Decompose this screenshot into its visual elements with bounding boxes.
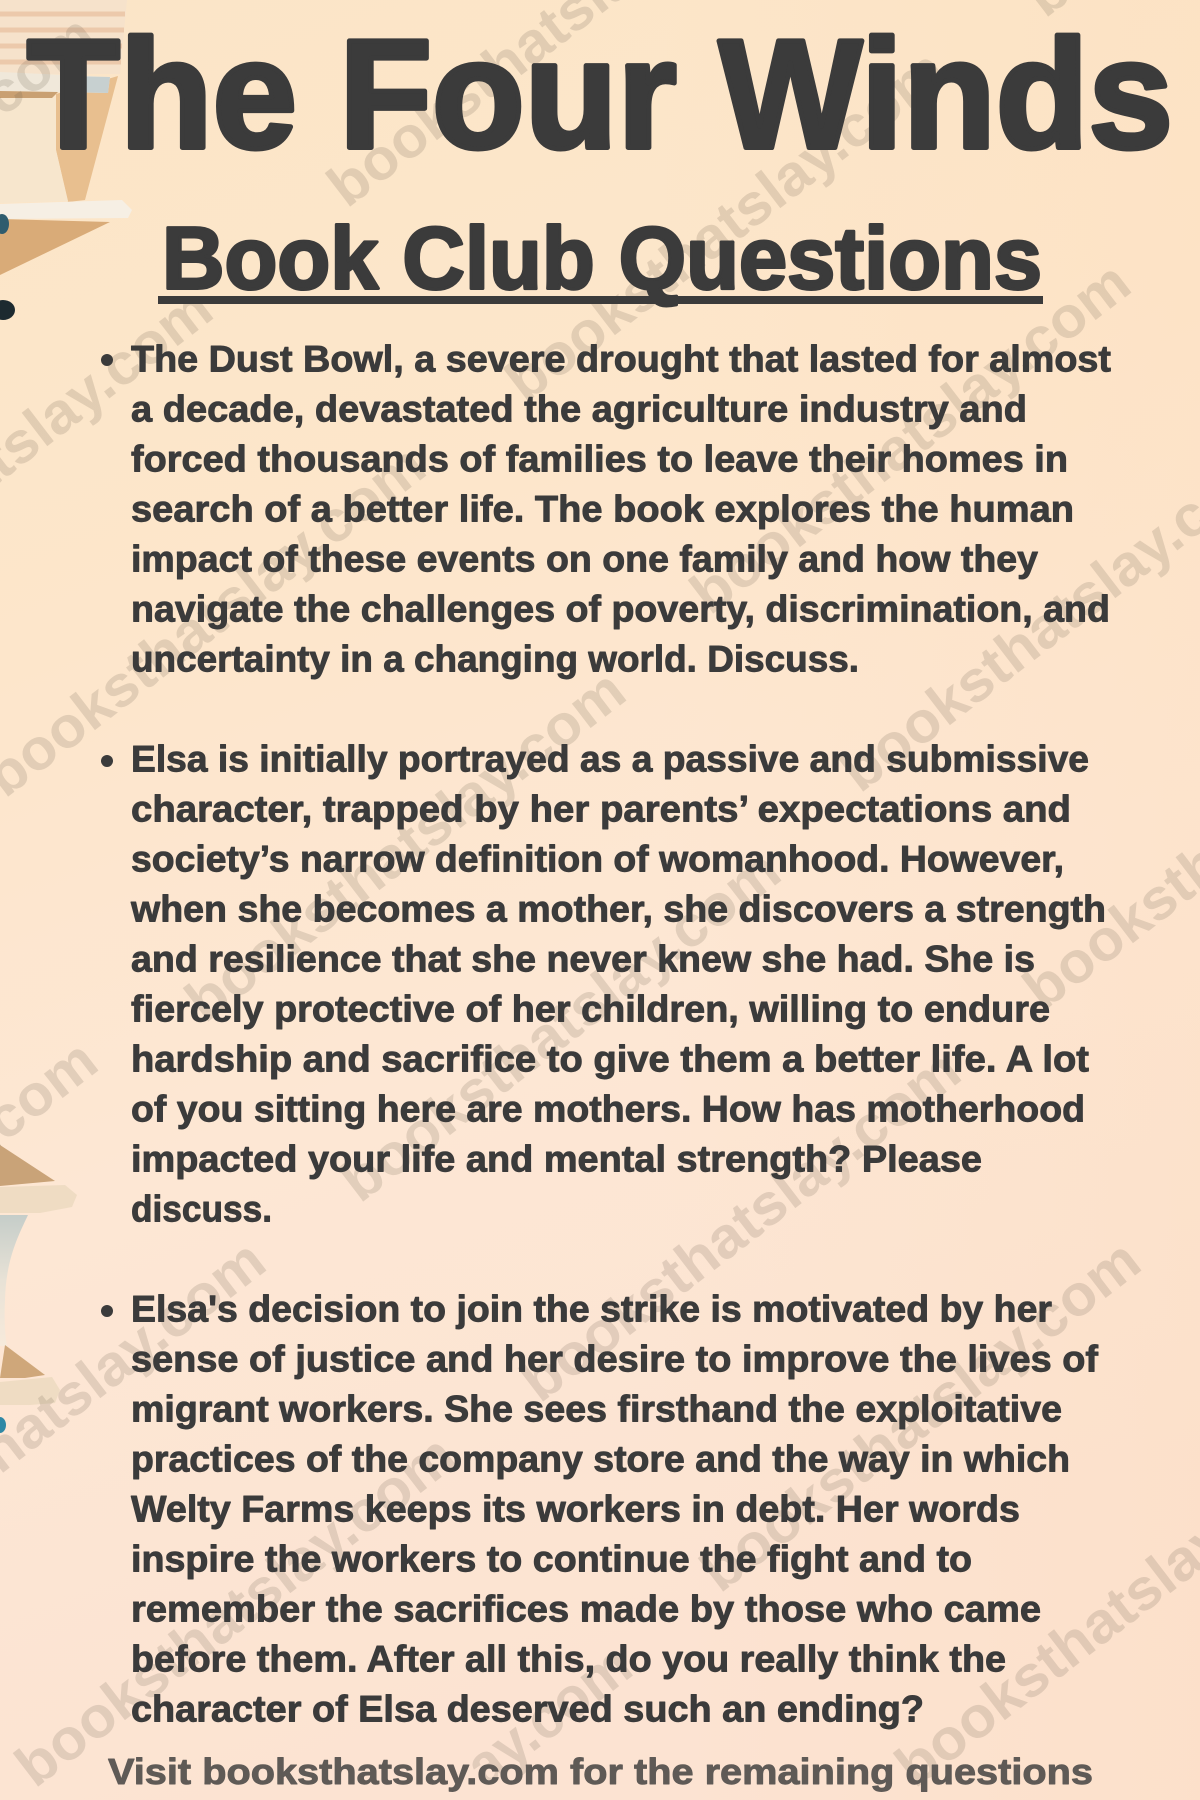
watermarks: booksthatslay.com — [493, 37, 957, 414]
question 1: The Dust Bowl, a severe drought that lasted for almost — [131, 338, 1112, 380]
question 2 — [101, 738, 1106, 1230]
watermarks: booksthatslay.com — [678, 249, 1142, 626]
question 2: when she becomes a mother, she discovers a strength — [130, 888, 1106, 930]
question 2: impacted your life and mental strength? Please — [131, 1138, 982, 1180]
question 3: inspire the workers to continue the fight and to — [131, 1538, 972, 1580]
question 1: forced thousands of families to leave their homes in — [131, 438, 1068, 480]
question 1 — [101, 338, 1112, 680]
question 3: remember the sacrifices made by those who came — [131, 1588, 1041, 1630]
question 2: of you sitting here are mothers. How has motherhood — [131, 1088, 1085, 1130]
watermarks: booksthatslay.com — [3, 1422, 467, 1799]
question 3: migrant workers. She sees firsthand the exploitative — [131, 1388, 1062, 1430]
question 1: navigate the challenges of poverty, discrimination, and — [131, 588, 1110, 630]
question 3 — [101, 1288, 1099, 1730]
question 1: a decade, devastated the agriculture industry and — [131, 388, 1027, 430]
question 3: practices of the company store and the way in which — [131, 1438, 1070, 1480]
question 1: uncertainty in a changing world. Discuss. — [131, 638, 859, 680]
question 1: impact of these events on one family and how they — [131, 538, 1038, 580]
subtitle: Book Club Questions — [162, 208, 1042, 308]
watermarks: booksthatslay.com — [688, 1227, 1152, 1604]
question 2: Elsa is initially portrayed as a passive and submissive — [131, 738, 1089, 780]
question 3: Welty Farms keeps its workers in debt. Her words — [131, 1488, 1020, 1530]
question 2: character, trapped by her parents’ expectations and — [131, 788, 1071, 830]
book stack decoration: lower left — [0, 1145, 77, 1433]
question 3: character of Elsa deserved such an ending? — [131, 1688, 924, 1730]
watermarks: booksthatslay.com — [173, 657, 637, 1034]
question 3: Elsa's decision to join the strike is motivated by her — [131, 1288, 1052, 1330]
watermarks: booksthatslay.com — [508, 1037, 972, 1414]
book stack decoration: top left — [0, 0, 132, 320]
footer call to action: Visit booksthatslay.com for the remaining questions — [108, 1751, 1093, 1792]
question 3: before them. After all this, do you really think the — [131, 1638, 1006, 1680]
question 3: sense of justice and her desire to improve the lives of — [131, 1338, 1099, 1380]
question 2: fiercely protective of her children, willing to endure — [131, 988, 1050, 1030]
question 2: and resilience that she never knew she had. She is — [131, 938, 1035, 980]
question 2: society’s narrow definition of womanhood. However, — [131, 838, 1064, 880]
question 2: hardship and sacrifice to give them a better life. A lot — [131, 1038, 1090, 1080]
watermarks: booksthatslay.com — [328, 837, 792, 1214]
question 1: search of a better life. The book explores the human — [131, 488, 1074, 530]
watermarks: ay.com — [453, 1632, 644, 1799]
title: The Four Winds — [27, 8, 1173, 180]
question 2: discuss. — [131, 1188, 272, 1230]
